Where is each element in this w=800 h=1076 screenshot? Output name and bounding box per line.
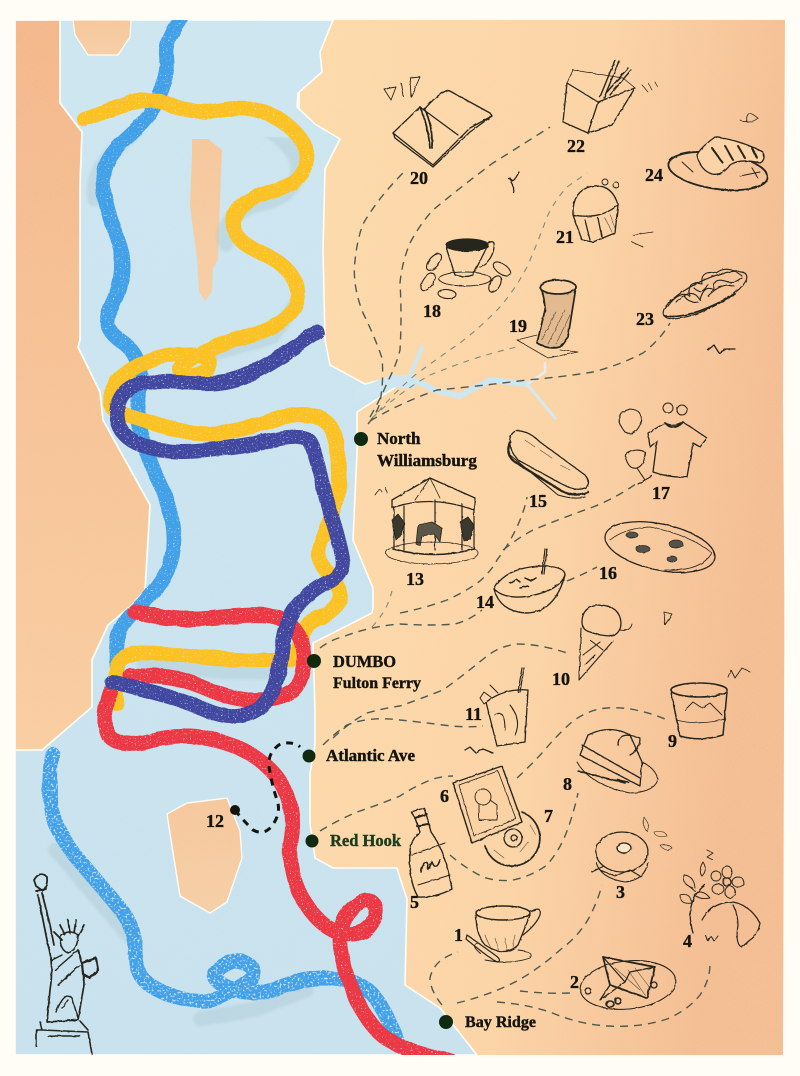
icon: takeout box 22	[563, 60, 657, 133]
number 22: 22	[567, 136, 585, 156]
icon: latte cup 1	[466, 906, 540, 962]
icon: vinyl record 7	[485, 812, 540, 866]
route: yellow line	[84, 100, 340, 704]
dashed routes: Atlantic Ave	[323, 644, 567, 745]
number 10: 10	[552, 669, 570, 689]
number 19: 19	[509, 316, 527, 336]
icon: carousel 13	[375, 478, 478, 564]
icon: coffee and beans 18	[418, 239, 513, 299]
label: Fulton Ferry: Fulton Ferry	[333, 675, 421, 692]
number 5: 5	[410, 892, 419, 912]
icon: whiskey glass 9	[671, 668, 750, 739]
stop dot: Bay Ridge	[439, 1015, 453, 1029]
number 15: 15	[529, 491, 547, 511]
route: navy line	[112, 332, 343, 716]
stop dot: Red Hook	[306, 834, 318, 848]
dashed routes: Bay Ridge	[430, 885, 710, 1026]
route: red line upper	[130, 612, 304, 700]
number 23: 23	[636, 309, 654, 329]
label: Bay Ridge: Bay Ridge	[465, 1014, 536, 1031]
icon: mint cocktail 11	[480, 668, 528, 746]
route shadows	[56, 112, 306, 1019]
icon: t-shirt glasses wine 17	[619, 403, 707, 484]
icon: cake slice 8	[577, 730, 658, 793]
icon: soup bowl 14	[494, 549, 565, 613]
number 13: 13	[406, 569, 424, 589]
east land	[300, 20, 785, 1055]
icon: pasta plate 23	[658, 262, 752, 328]
number 24: 24	[645, 165, 663, 185]
number 8: 8	[563, 774, 572, 794]
label: North Williamsburg: Williamsburg	[377, 451, 477, 470]
stop dot: North Williamsburg	[354, 432, 368, 446]
icon: steak plate 24	[666, 114, 770, 196]
dashed routes: DUMBO	[320, 483, 637, 648]
number 4: 4	[683, 931, 692, 951]
icon: beer glass 19	[517, 280, 578, 358]
number 7: 7	[544, 806, 553, 826]
number 18: 18	[423, 301, 441, 321]
dashed routes: North Williamsburg	[354, 127, 670, 424]
icon: club sandwich plate 2	[578, 956, 678, 1014]
label: DUMBO: DUMBO	[333, 652, 396, 671]
icon: statue of liberty	[34, 874, 98, 1054]
label: North Williamsburg: North	[377, 429, 421, 448]
island: governors	[167, 798, 242, 913]
icon: flower and leaves 4	[680, 850, 760, 947]
west land	[15, 20, 150, 750]
number 9: 9	[668, 731, 677, 751]
icon: framed picture 6	[453, 766, 522, 843]
stop dot: Atlantic Ave	[302, 750, 316, 762]
icon: bottle 5	[410, 808, 452, 897]
number 12: 12	[206, 811, 224, 831]
number 6: 6	[440, 786, 449, 806]
river inlet	[360, 347, 555, 418]
label: Atlantic Ave: Atlantic Ave	[326, 746, 415, 765]
label: Red Hook: Red Hook	[330, 831, 402, 850]
route: blue line north	[103, 20, 180, 680]
squiggle: near mojito	[465, 747, 493, 753]
island: top left	[73, 20, 131, 55]
icon: sandwich 15	[508, 431, 588, 498]
icon: cupcake 21	[573, 179, 653, 247]
number 11: 11	[465, 704, 482, 724]
route: red line lower	[105, 688, 450, 1060]
icon: ice cream 10	[579, 605, 672, 680]
icon: bagel sandwich 3	[592, 817, 672, 882]
stop dot: 12	[230, 805, 240, 815]
number 16: 16	[599, 563, 617, 583]
squiggle: near book	[508, 172, 519, 192]
number 3: 3	[616, 882, 625, 902]
number 2: 2	[570, 972, 579, 992]
number 17: 17	[652, 483, 670, 503]
number 20: 20	[410, 168, 428, 188]
squiggle: upper right	[708, 345, 735, 353]
number 21: 21	[556, 227, 574, 247]
icon: book 20	[384, 77, 492, 167]
icon: pizza 16	[600, 513, 720, 581]
number 1: 1	[454, 925, 463, 945]
stop dot: DUMBO	[307, 654, 321, 668]
number 14: 14	[476, 592, 494, 612]
route: blue line south	[50, 754, 397, 1042]
island: long narrow	[190, 139, 222, 301]
stop: 12 connector dashed	[235, 743, 300, 832]
dashed routes: Red Hook	[320, 708, 667, 881]
water	[15, 20, 477, 1055]
